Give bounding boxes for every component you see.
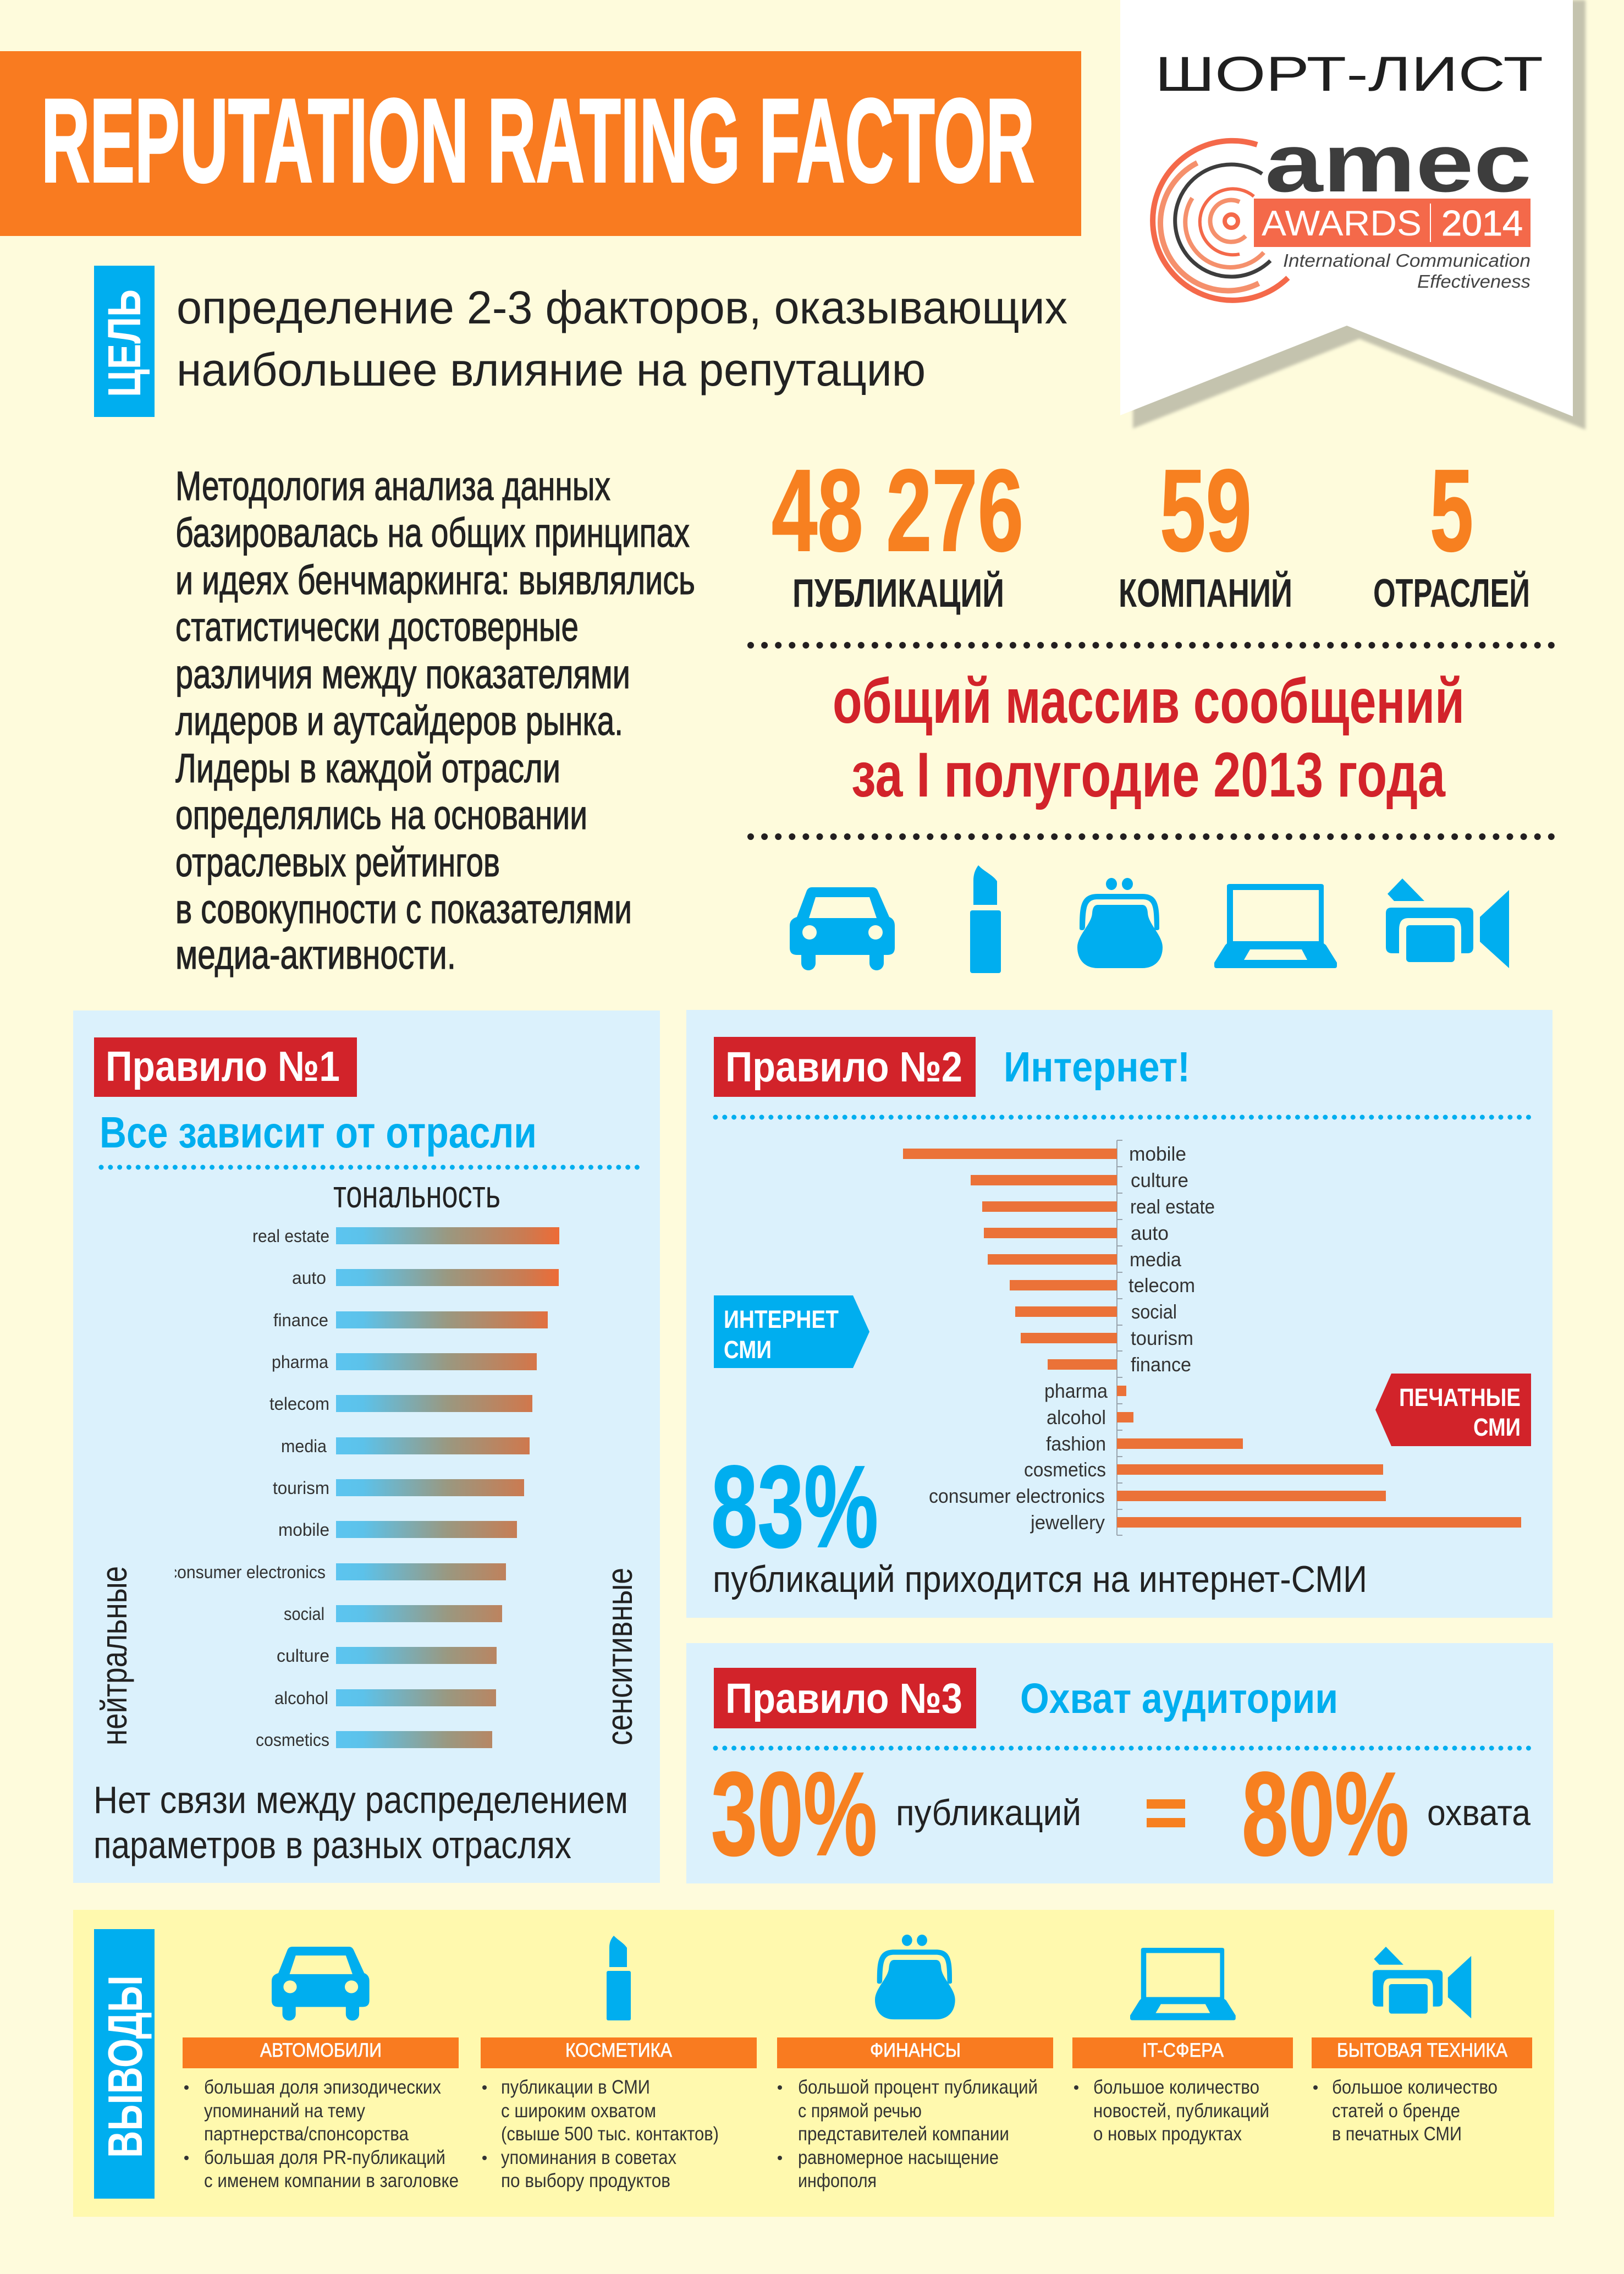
icon: car bbox=[272, 1947, 370, 2020]
stat: industries: ОТРАСЛЕЙ bbox=[1373, 570, 1530, 616]
icon: video camera bbox=[1373, 1947, 1471, 2018]
rule 1 heading: Все зависит от отрасли bbox=[100, 1108, 537, 1157]
list: cosmetics: (свыше 500 тыс. контактов) bbox=[501, 2123, 719, 2145]
bar chart: tonality by industry: culture bbox=[277, 1646, 329, 1666]
panel: conclusions bbox=[73, 1910, 1554, 2217]
column: cars bbox=[183, 1947, 459, 2191]
rule 3 heading: Охват аудитории bbox=[1020, 1675, 1338, 1722]
header: home appliances: БЫТОВАЯ ТЕХНИКА bbox=[1337, 2040, 1508, 2061]
goal label: ЦЕЛЬ bbox=[98, 289, 150, 397]
bar chart: tonality by industry: alcohol bbox=[274, 1688, 328, 1708]
arrow label: internet media: СМИ bbox=[724, 1336, 772, 1364]
methodology text block: Методология анализа данных bbox=[175, 463, 610, 509]
column: cosmetics bbox=[481, 1936, 757, 2191]
icon: purse bbox=[875, 1935, 955, 2019]
list: finance: большой процент публикаций bbox=[798, 2077, 1038, 2098]
equation: 30 percent of publications equals 80 percent reach: 80% bbox=[1242, 1747, 1409, 1880]
rule 1 conclusion bbox=[93, 1778, 628, 1866]
arrow label: print media bbox=[1375, 1374, 1531, 1446]
diverging bar chart: internet vs print media: alcohol bbox=[1047, 1406, 1106, 1429]
icon: laptop bbox=[1130, 1948, 1236, 2020]
stat: industries bbox=[1373, 445, 1530, 616]
subheading: total message volume: за I полугодие 2013 года bbox=[851, 740, 1446, 810]
bar chart: tonality by industry: real estate bbox=[252, 1226, 329, 1246]
diverging bar chart: internet vs print media: culture bbox=[1131, 1169, 1188, 1191]
header: cosmetics bbox=[481, 2037, 757, 2068]
list: cosmetics: упоминания в советах bbox=[501, 2147, 676, 2168]
diverging bar chart: internet vs print media: finance bbox=[1131, 1353, 1191, 1376]
methodology text block: лидеров и аутсайдеров рынка. bbox=[175, 698, 623, 744]
conclusions label: ВЫВОДЫ bbox=[98, 1975, 152, 2158]
list: home appliances: большое количество bbox=[1332, 2077, 1498, 2098]
header: cosmetics: КОСМЕТИКА bbox=[565, 2040, 673, 2061]
list: IT: большое количество bbox=[1093, 2077, 1259, 2098]
bar chart: tonality by industry: cosmetics bbox=[256, 1730, 329, 1750]
methodology text block: медиа-активности. bbox=[175, 932, 456, 977]
arrow label: print media: ПЕЧАТНЫЕ bbox=[1399, 1383, 1521, 1411]
bar chart: tonality by industry: telecom bbox=[269, 1394, 329, 1414]
bar chart: tonality by industry: pharma bbox=[272, 1352, 328, 1372]
list: IT: о новых продуктах bbox=[1093, 2123, 1242, 2145]
column: IT bbox=[1072, 1948, 1293, 2145]
diverging bar chart: internet vs print media: cosmetics bbox=[1024, 1458, 1106, 1481]
ribbon: shortlist badge bbox=[1120, 0, 1586, 430]
list: home appliances: статей о бренде bbox=[1332, 2100, 1460, 2122]
header: IT: IT-СФЕРА bbox=[1142, 2040, 1224, 2061]
methodology text block: Лидеры в каждой отрасли bbox=[175, 745, 560, 791]
diverging bar chart: internet vs print media: real estate bbox=[1130, 1195, 1215, 1218]
list: cosmetics: с широким охватом bbox=[501, 2100, 656, 2122]
list: finance: инфополя bbox=[798, 2170, 877, 2191]
diverging bar chart: internet vs print media: jewellery bbox=[1030, 1511, 1105, 1534]
AMEC logo: Effectiveness bbox=[1417, 271, 1531, 292]
list: finance: с прямой речью bbox=[798, 2100, 922, 2122]
shortlist heading: ШОРТ-ЛИСТ bbox=[1155, 46, 1543, 101]
equation: 30 percent of publications equals 80 percent reach: публикаций bbox=[896, 1792, 1081, 1833]
header: finance: ФИНАНСЫ bbox=[870, 2040, 961, 2061]
bar chart: tonality by industry bbox=[169, 1226, 559, 1750]
subheading: total message volume bbox=[833, 666, 1465, 810]
list: finance bbox=[778, 2077, 1038, 2191]
rule 1 conclusion: Нет связи между распределением bbox=[93, 1778, 628, 1821]
column: home appliances bbox=[1312, 1947, 1532, 2145]
bar chart: tonality by industry: mobile bbox=[278, 1520, 329, 1540]
icon: car bbox=[790, 887, 895, 970]
stat: companies bbox=[1119, 445, 1292, 616]
arrow label: print media: СМИ bbox=[1473, 1413, 1521, 1441]
icon: purse bbox=[1077, 878, 1163, 968]
stat: 83 percent: 83% bbox=[711, 1441, 878, 1572]
AMEC logo bbox=[1153, 117, 1532, 300]
bar chart: tonality by industry: finance bbox=[273, 1310, 328, 1330]
list: cars: партнерства/спонсорства bbox=[204, 2123, 409, 2145]
diverging bar chart: internet vs print media: telecom bbox=[1128, 1274, 1195, 1297]
list: IT bbox=[1074, 2077, 1269, 2145]
goal text: наибольшее влияние на репутацию bbox=[177, 344, 926, 396]
panel: rule 2 bbox=[686, 1010, 1553, 1618]
icon: lipstick bbox=[970, 865, 1001, 973]
diverging bar chart: internet vs print media: pharma bbox=[1044, 1380, 1108, 1402]
rule 3 badge: Правило №3 bbox=[725, 1675, 962, 1722]
methodology text block: отраслевых рейтингов bbox=[175, 839, 500, 885]
rule 2 heading: Интернет! bbox=[1004, 1043, 1190, 1091]
header: cars bbox=[183, 2037, 459, 2068]
axis label: neutral: нейтральные bbox=[93, 1566, 134, 1745]
icon: video camera bbox=[1386, 878, 1509, 968]
bar chart: tonality by industry: consumer electronics bbox=[169, 1562, 326, 1582]
methodology text block: и идеях бенчмаркинга: выявлялись bbox=[175, 557, 695, 603]
AMEC logo: International Communication bbox=[1283, 250, 1531, 271]
chart title: tonality: тональность bbox=[333, 1173, 500, 1216]
methodology text block bbox=[175, 463, 695, 977]
icon: lipstick bbox=[607, 1936, 631, 2020]
panel: rule 1 bbox=[73, 1010, 660, 1883]
equation: 30 percent of publications equals 80 percent reach bbox=[711, 1747, 1531, 1880]
header: home appliances bbox=[1312, 2037, 1532, 2068]
diverging bar chart: internet vs print media: consumer electronics bbox=[929, 1485, 1105, 1507]
stat caption: публикаций приходится на интернет-СМИ bbox=[713, 1558, 1367, 1600]
key stats bbox=[772, 445, 1530, 616]
list: cars: с именем компании в заголовке bbox=[204, 2170, 459, 2191]
list: cars: упоминаний на тему bbox=[204, 2100, 365, 2122]
list: cosmetics: публикации в СМИ bbox=[501, 2077, 650, 2098]
diverging bar chart: internet vs print media bbox=[903, 1140, 1521, 1535]
list: IT: новостей, публикаций bbox=[1093, 2100, 1269, 2122]
methodology text block: различия между показателями bbox=[175, 651, 630, 697]
list: cosmetics: по выбору продуктов bbox=[501, 2170, 670, 2191]
list: finance: равномерное насыщение bbox=[798, 2147, 999, 2168]
methodology text block: определялись на основании bbox=[175, 792, 587, 838]
equation: 30 percent of publications equals 80 percent reach: охвата bbox=[1427, 1792, 1531, 1833]
header: IT bbox=[1072, 2037, 1293, 2068]
diverging bar chart: internet vs print media: tourism bbox=[1131, 1327, 1193, 1349]
rule 1 conclusion: параметров в разных отраслях bbox=[93, 1823, 571, 1866]
stat: companies: КОМПАНИЙ bbox=[1119, 570, 1292, 616]
header: finance bbox=[777, 2037, 1053, 2068]
rule 1 badge: Правило №1 bbox=[106, 1043, 340, 1090]
list: home appliances bbox=[1313, 2077, 1498, 2145]
AMEC logo: amec bbox=[1265, 117, 1532, 209]
stat: industries: 5 bbox=[1430, 445, 1473, 575]
panel: rule 3 bbox=[686, 1643, 1553, 1883]
stat: companies: 59 bbox=[1160, 445, 1252, 575]
column: finance bbox=[777, 1935, 1053, 2191]
bar chart: tonality by industry: social bbox=[284, 1604, 324, 1624]
list: cars: большая доля PR-публикаций bbox=[204, 2147, 445, 2168]
rule 2 badge: Правило №2 bbox=[725, 1043, 962, 1091]
bar chart: tonality by industry: tourism bbox=[273, 1478, 329, 1498]
diverging bar chart: internet vs print media: fashion bbox=[1046, 1432, 1106, 1455]
stat: publications: ПУБЛИКАЦИЙ bbox=[792, 570, 1004, 616]
arrow label: internet media: ИНТЕРНЕТ bbox=[724, 1305, 839, 1333]
diverging bar chart: internet vs print media: social bbox=[1131, 1300, 1177, 1323]
diverging bar chart: internet vs print media: auto bbox=[1131, 1222, 1169, 1244]
AMEC logo: AWARDS bbox=[1262, 203, 1422, 243]
list: home appliances: в печатных СМИ bbox=[1332, 2123, 1462, 2145]
list: finance: представителей компании bbox=[798, 2123, 1009, 2145]
bar chart: tonality by industry: media bbox=[281, 1436, 327, 1456]
bar chart: tonality by industry: auto bbox=[292, 1268, 326, 1288]
diverging bar chart: internet vs print media: media bbox=[1130, 1248, 1182, 1271]
list: cosmetics bbox=[482, 2077, 719, 2191]
stat: publications: 48 276 bbox=[772, 445, 1023, 575]
arrow label: internet media bbox=[714, 1295, 869, 1368]
list: cars bbox=[184, 2077, 459, 2191]
methodology text block: статистически достоверные bbox=[175, 604, 579, 650]
methodology text block: в совокупности с показателями bbox=[175, 886, 632, 932]
title banner bbox=[0, 51, 1081, 236]
stat: publications bbox=[772, 445, 1023, 616]
AMEC logo: 2014 bbox=[1441, 203, 1523, 243]
list: cars: большая доля эпизодических bbox=[204, 2077, 441, 2098]
goal text bbox=[177, 282, 1067, 396]
equation: 30 percent of publications equals 80 percent reach: 30% bbox=[711, 1747, 877, 1880]
diverging bar chart: internet vs print media: mobile bbox=[1129, 1143, 1186, 1165]
goal text: определение 2-3 факторов, оказывающих bbox=[177, 282, 1067, 333]
methodology text block: базировалась на общих принципах bbox=[175, 510, 690, 556]
icon: laptop bbox=[1214, 884, 1337, 968]
header: cars: АВТОМОБИЛИ bbox=[260, 2040, 382, 2061]
axis label: sensitive: сенситивные bbox=[599, 1568, 640, 1745]
